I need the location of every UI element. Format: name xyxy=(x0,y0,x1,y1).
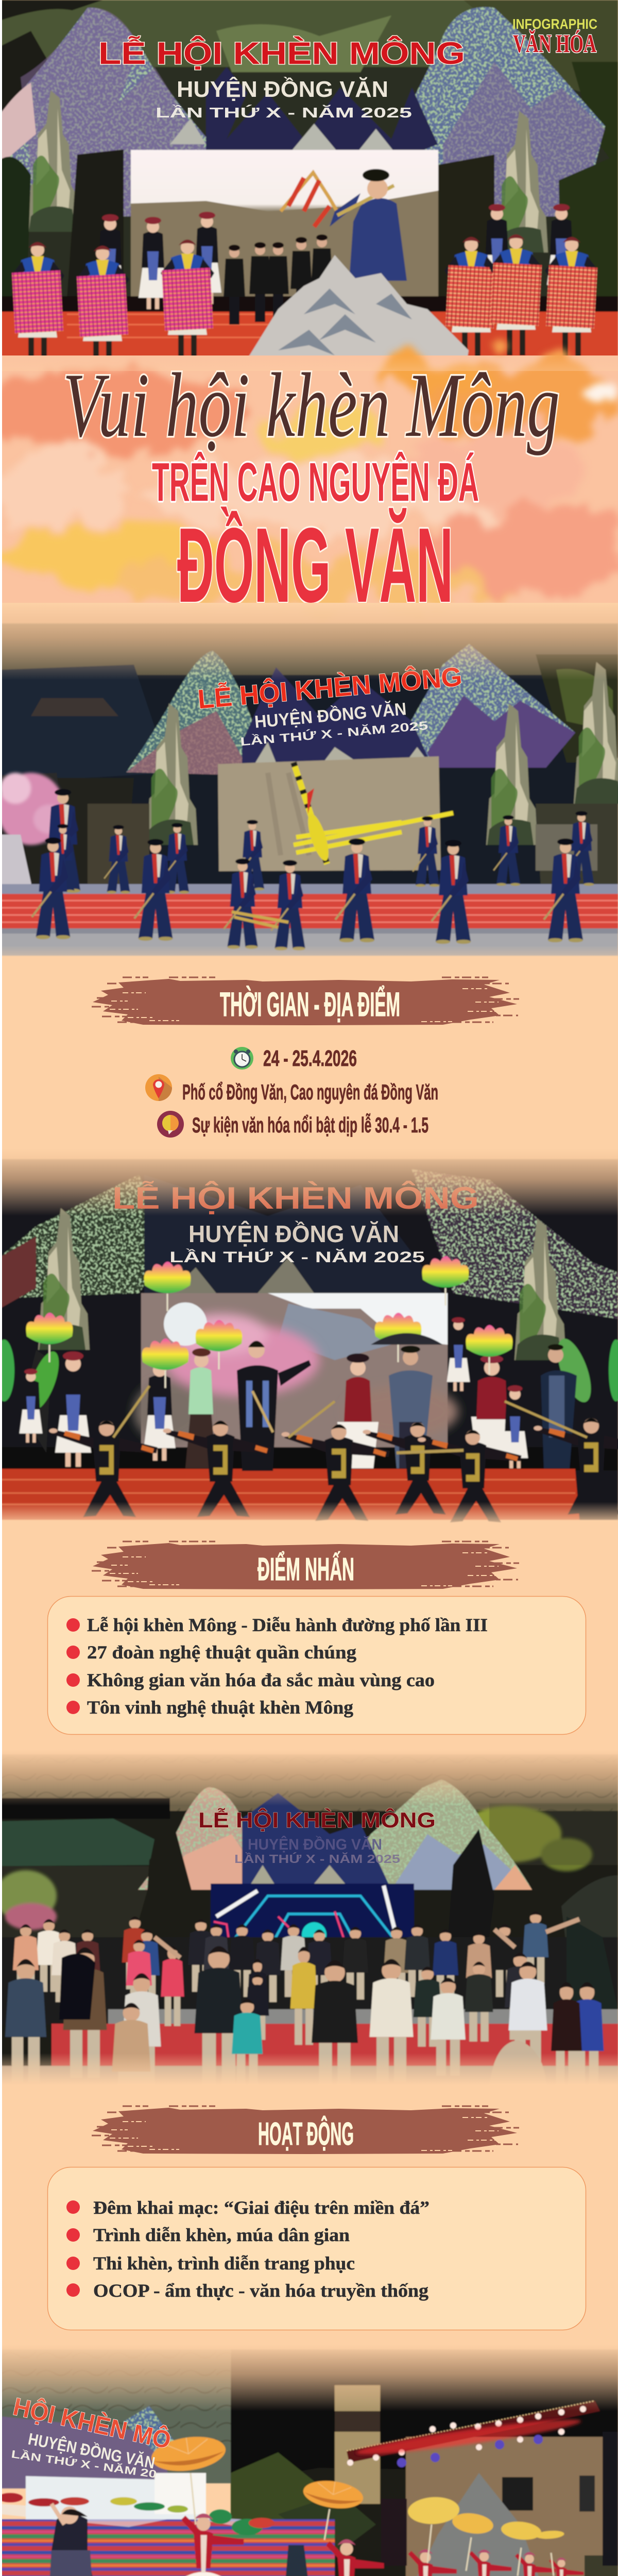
bottom fade photo 3 xyxy=(0,1502,618,1528)
heading: time and place: THỜI GIAN - ĐỊA ĐIỂM xyxy=(220,985,400,1023)
bottom fade photo 4 xyxy=(0,2053,618,2085)
sign line 3: LẦN THỨ X - NĂM 2025 xyxy=(156,105,412,121)
logo infographic: INFOGRAPHIC xyxy=(512,16,597,32)
activity item 3: Thi khèn, trình diễn trang phục xyxy=(93,2253,355,2274)
photo 2: khen performers xyxy=(0,623,618,956)
top fade photo 4 xyxy=(0,1749,618,1806)
sign text photo 3 xyxy=(112,1181,479,1266)
sign line 3: LẦN THỨ X - NĂM 2025 xyxy=(169,1248,425,1266)
sign text photo 5 xyxy=(10,2392,174,2481)
icon: speech bubble xyxy=(157,1111,184,1138)
heading: activities xyxy=(92,2106,519,2154)
peach panel activities xyxy=(0,2085,618,2348)
top fade photo 5 xyxy=(0,2344,618,2411)
sign line 3: LẦN THỨ X - NĂM 2025 xyxy=(239,718,428,748)
event text: Sự kiện văn hóa nổi bật dịp lễ 30.4 - 1.5 xyxy=(192,1112,428,1137)
brand logo top right xyxy=(512,16,597,58)
highlight item 3: Không gian văn hóa đa sắc màu vùng cao xyxy=(87,1670,435,1690)
top fade photo 3 xyxy=(0,1149,618,1216)
sign line 1: HỘI KHÈN MÔ xyxy=(11,2392,174,2454)
heading: highlights: ĐIỂM NHẤN xyxy=(258,1552,354,1587)
highlight item 1: Lễ hội khèn Mông - Diễu hành đường phố lần III xyxy=(87,1615,488,1635)
highlight item 2: 27 đoàn nghệ thuật quần chúng xyxy=(87,1642,356,1663)
sign line 1: LỄ HỘI KHÈN MÔNG xyxy=(98,36,465,71)
panel: activities list xyxy=(47,2167,586,2330)
icon: location pin xyxy=(145,1074,172,1101)
heading: time and place xyxy=(92,977,519,1025)
performer green dress xyxy=(185,1348,216,1468)
date text: 24 - 25.4.2026 xyxy=(263,1046,357,1071)
panel: highlights list xyxy=(47,1596,586,1734)
peach panel highlights xyxy=(0,1528,618,1754)
performer male host xyxy=(237,1341,311,1471)
activity item 1: Đêm khai mạc: “Giai điệu trên miền đá” xyxy=(93,2197,430,2218)
sign text tilted xyxy=(196,662,467,752)
activity item 2: Trình diễn khèn, múa dân gian xyxy=(93,2225,350,2245)
performer grey man xyxy=(389,1346,433,1468)
heading: activities: HOẠT ĐỘNG xyxy=(258,2116,354,2152)
sign line 2: HUYỆN ĐỒNG VĂN xyxy=(188,1221,399,1247)
highlight item 4: Tôn vinh nghệ thuật khèn Mông xyxy=(87,1697,353,1718)
performer navy man xyxy=(541,1344,577,1468)
sign line 2: HUYỆN ĐỒNG VĂN xyxy=(254,699,407,732)
activity item 4: OCOP - ẩm thực - văn hóa truyền thống xyxy=(93,2280,428,2301)
performer red jacket xyxy=(337,1353,379,1468)
title block xyxy=(63,354,560,624)
sign line 3: LẦN THỨ X - NĂM 20 xyxy=(10,2448,158,2481)
heading: highlights xyxy=(92,1541,519,1589)
sign line 2: HUYỆN ĐỒNG VĂN xyxy=(177,76,388,102)
sign line 3: LẦN THỨ X - NĂM 2025 xyxy=(234,1852,400,1866)
fade photo 2 to peach xyxy=(0,945,618,974)
sign line 2: HUYỆN ĐỒNG VĂN xyxy=(248,1836,382,1853)
photo 3: singers and dancers xyxy=(0,1159,618,1522)
left page margin xyxy=(0,0,2,2576)
peach panel: time and place xyxy=(0,974,618,1159)
performer red dress right xyxy=(471,1355,515,1459)
watercolor title background xyxy=(0,355,618,623)
sign text photo 4 xyxy=(198,1807,436,1866)
stage sign text hero xyxy=(98,36,465,121)
icon: clock xyxy=(231,1047,253,1070)
sign line 2: HUYỆN ĐỒNG VĂN xyxy=(27,2430,157,2472)
hero photo: festival stage xyxy=(0,0,618,371)
sign line 1: LỄ HỘI KHÈN MÔNG xyxy=(196,662,464,715)
sign line 1: LỄ HỘI KHÈN MÔNG xyxy=(112,1181,479,1215)
photo 5: parasol dancers xyxy=(0,2349,618,2576)
sign line 1: LỄ HỘI KHÈN MÔNG xyxy=(198,1807,436,1832)
fade between hero and photo 2 xyxy=(0,603,618,680)
photo 4: crowd dancing xyxy=(0,1754,618,2112)
